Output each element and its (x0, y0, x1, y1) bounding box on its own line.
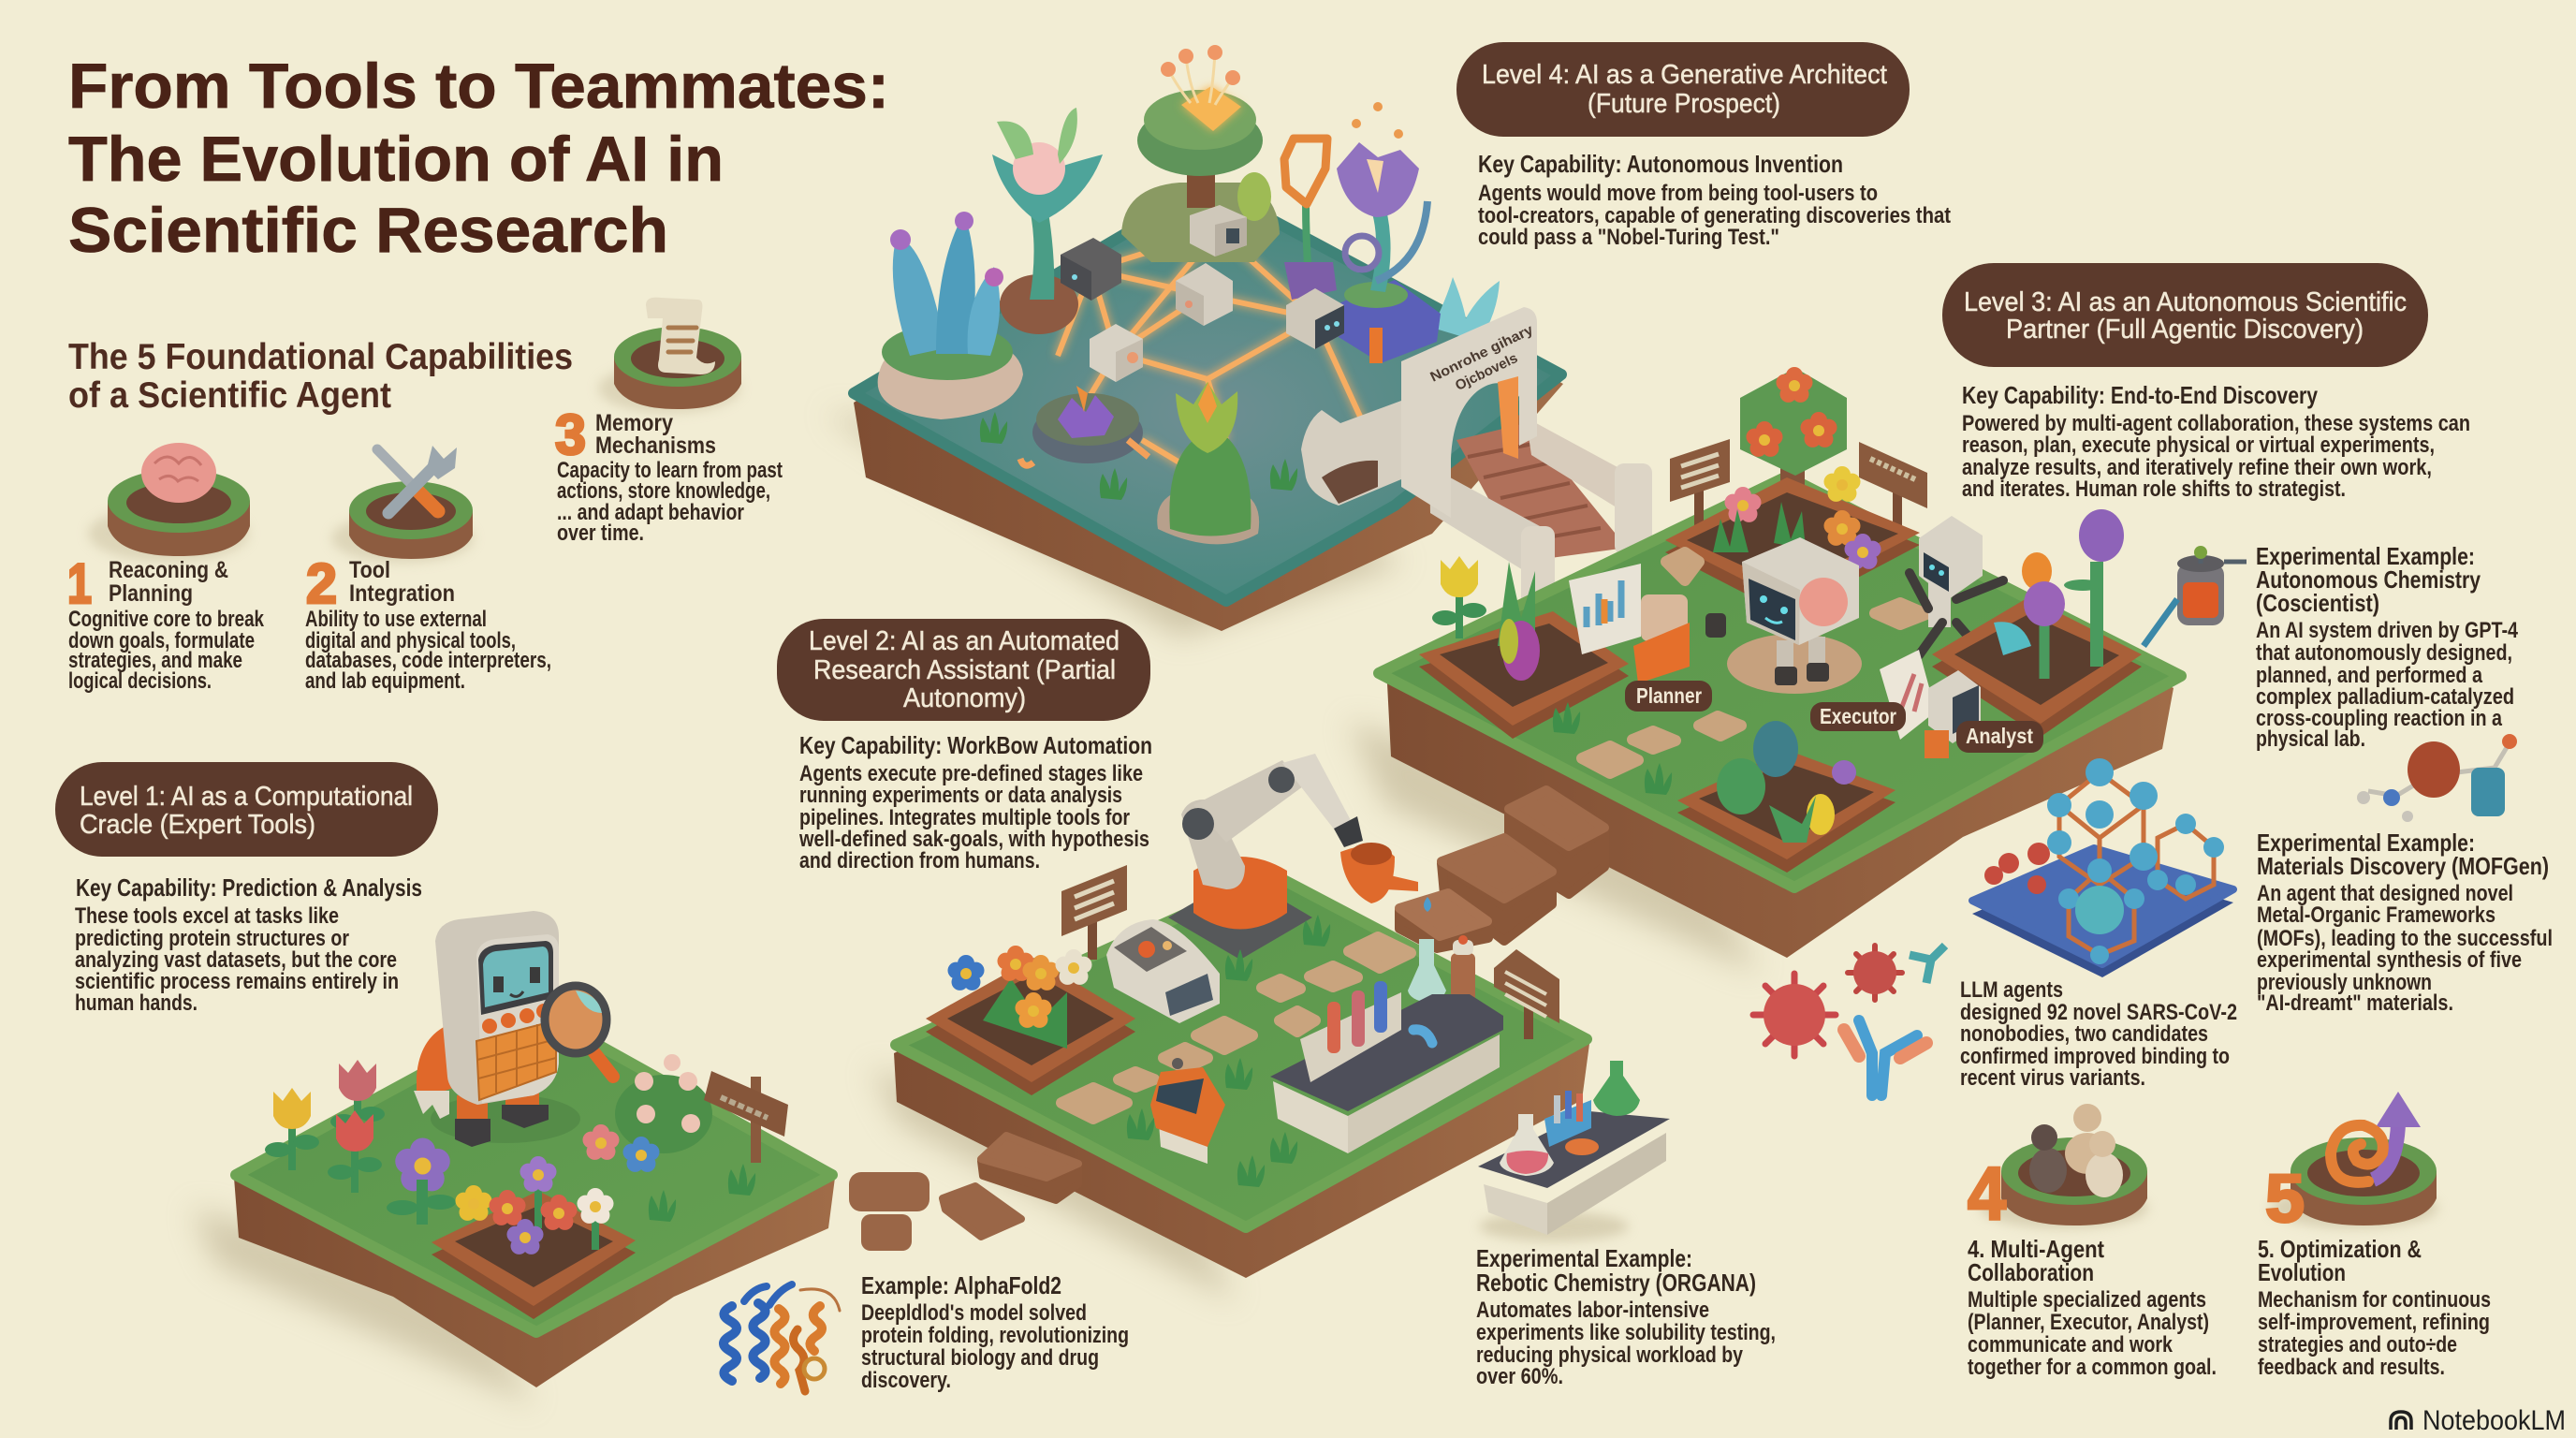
level 1 flower bed (432, 1156, 636, 1319)
capability 3: actions, store knowledge, (557, 478, 770, 504)
level 3 small robot (1910, 516, 2003, 655)
capability 3: 3 (555, 404, 586, 466)
level 2 grass tufts (1127, 915, 1330, 1187)
pill: level 2: Level 2: AI as an Automated (809, 626, 1120, 656)
text: capability 4 (1968, 1235, 2217, 1380)
capability 3: Memory (595, 410, 673, 436)
icon: tools plinth (331, 446, 474, 563)
text: capability 4: 4. Multi-Agent (1968, 1235, 2104, 1263)
icon: collaboration plinth (1980, 1104, 2148, 1228)
pill: level 3: Level 3: AI as an Autonomous Scientific (1964, 287, 2407, 317)
level 2 pavers (1061, 937, 1411, 1119)
text: level 1: predicting protein structures or (75, 926, 349, 951)
icon: molecule (2357, 734, 2517, 822)
text: level 4: Key Capability: Autonomous Invention (1478, 150, 1843, 178)
level 2 test tube rack (1300, 981, 1432, 1082)
capability 2: Tool (349, 557, 390, 583)
level 3 chart board and planner robot (1569, 564, 1690, 683)
text: level 2: pipelines. Integrates multiple tools for (799, 805, 1130, 830)
icon: evolution plinth (2270, 1092, 2438, 1228)
heading: foundational capabilities: of a Scientific Agent (68, 375, 391, 416)
text: coscientist example: planned, and performed a (2256, 663, 2483, 688)
capability 2: Integration (349, 580, 455, 607)
text: level 2 (798, 731, 1152, 873)
stepping stones: level 2 to 3 (1399, 790, 1604, 948)
text: robotic chemistry example: Automates labor-intensive (1476, 1298, 1709, 1323)
capability 2: and lab equipment. (305, 668, 465, 694)
text: capability 5: strategies and outo÷de (2258, 1332, 2457, 1357)
text: capability 4: communicate and work (1968, 1332, 2174, 1357)
capability 1: Planning (109, 580, 193, 607)
text: coscientist example (2256, 542, 2519, 752)
level 4 front tulip plant (980, 382, 1297, 544)
level 3 signs (1670, 439, 1927, 543)
icon: protein structure (724, 1284, 840, 1391)
text: robotic chemistry example: Rebotic Chemistry (ORGANA) (1476, 1269, 1756, 1297)
heading: foundational capabilities: The 5 Foundational Capabilities (68, 337, 573, 377)
text: coscientist example: Experimental Example: (2256, 542, 2475, 570)
level 3 right bed (1932, 509, 2142, 737)
text: level 2: Key Capability: WorkBow Automation (799, 731, 1152, 759)
text: level 2: Agents execute pre-defined stages like (799, 761, 1143, 786)
text: level 3: and iterates. Human role shifts to strategist. (1962, 477, 2346, 502)
text: AlphaFold2 example: protein folding, revolutionizing (861, 1323, 1129, 1348)
level 4 hexagon plant (1284, 139, 1337, 300)
level 2 lab bench (1270, 994, 1503, 1153)
capability 3: ... and adapt behavior (557, 500, 744, 525)
text: capability 5: 5. Optimization & (2258, 1235, 2422, 1263)
level 2 robot arm (1168, 754, 1363, 960)
level 3 analyst robot (1880, 650, 1981, 758)
title: Scientific Research (68, 195, 668, 266)
stepping stones: level 1 to 2 (849, 1136, 1078, 1251)
capability 1 (67, 552, 265, 694)
label: analyst: Analyst (1966, 724, 2033, 748)
capability 2: digital and physical tools, (305, 628, 516, 653)
level 4 glowing network (1058, 230, 1404, 468)
level 3 main robot (1705, 537, 1862, 694)
icon: number 5: 5 (2265, 1162, 2305, 1237)
text: level 2: running experiments or data analysis (799, 783, 1122, 808)
title: The Evolution of AI in (68, 124, 724, 195)
level 2 small orange device (1150, 1058, 1225, 1164)
text: LLM nanobodies example (1960, 977, 2237, 1091)
text: coscientist example: physical lab. (2256, 726, 2365, 752)
text: AlphaFold2 example: discovery. (861, 1368, 951, 1393)
text: coscientist example: Autonomous Chemistry (2256, 565, 2481, 594)
text: level 1: Key Capability: Prediction & Analysis (76, 873, 422, 902)
text: MOFGen example: An agent that designed novel (2257, 881, 2513, 906)
title: From Tools to Teammates: (68, 51, 889, 122)
level 1 magnifying glass (545, 986, 613, 1077)
island: level 4 (824, 45, 1652, 637)
text: capability 5 (2258, 1235, 2491, 1380)
text: MOFGen example: previously unknown (2257, 970, 2432, 995)
text: level 3: reason, plan, execute physical or virtual experiments, (1962, 433, 2435, 458)
level 3 back bed (1665, 466, 1920, 615)
level 4 purple flower (1337, 102, 1441, 363)
level 2 watering can (1340, 843, 1431, 912)
label: executor: Executor (1820, 704, 1896, 728)
text: AlphaFold2 example (861, 1271, 1129, 1393)
text: level 3 (1962, 381, 2470, 502)
level 3 left bed (1419, 556, 1629, 739)
text: capability 4: together for a common goal. (1968, 1355, 2217, 1380)
level 2 machine (1106, 919, 1220, 1023)
capability 2 (305, 552, 551, 694)
icon: reactor apparatus (2144, 546, 2247, 646)
island: level 3 (1348, 367, 2181, 974)
level 4 gate and bridge: Nonrohe gihary (1427, 321, 1536, 386)
text: LLM nanobodies example: recent virus variants. (1960, 1065, 2145, 1091)
text: level 2: well-defined sak-goals, with hypothesis (798, 827, 1149, 852)
text: level 4: could pass a "Nobel-Turing Test." (1478, 225, 1779, 250)
level 3 tree (1740, 367, 1847, 515)
capability 1: Cognitive core to break (68, 607, 265, 632)
text: robotic chemistry example: reducing physical workload by (1476, 1343, 1744, 1368)
capability 1: logical decisions. (68, 668, 212, 694)
label: planner: Planner (1636, 683, 1702, 708)
island: level 2 (871, 754, 1589, 1301)
level 3 pavers (1582, 552, 1926, 773)
icon: MOF crystal plate (1972, 758, 2233, 977)
pill: level 4: Level 4: AI as a Generative Architect (1482, 60, 1887, 90)
text: capability 5: feedback and results. (2258, 1355, 2445, 1380)
text: level 1: scientific process remains entirely in (75, 969, 399, 994)
level 1 calculator robot (414, 911, 580, 1147)
text: capability 4: Multiple specialized agents (1968, 1287, 2206, 1313)
pill: level 3: Partner (Full Agentic Discovery) (2006, 315, 2364, 345)
level 1 bush and sign (582, 1054, 788, 1222)
labels: agent roles (1625, 681, 2043, 753)
text: coscientist example: An AI system driven by GPT-4 (2256, 618, 2519, 643)
text: level 3: Powered by multi-agent collaboration, these systems can (1962, 411, 2470, 436)
pill: level 4 (1456, 42, 1910, 137)
text: AlphaFold2 example: Example: AlphaFold2 (861, 1271, 1061, 1299)
icon: number 4: 4 (1968, 1152, 2006, 1235)
pill: level 2: Research Assistant (Partial (813, 655, 1116, 685)
level 1 tulips (265, 1060, 456, 1225)
text: level 3: analyze results, and iteratively refine their own work, (1962, 455, 2432, 480)
text: MOFGen example: Experimental Example: (2257, 829, 2475, 857)
heading: foundational capabilities (68, 337, 573, 416)
text: MOFGen example: "AI-dreamt" materials. (2257, 990, 2453, 1016)
label: planner (1625, 681, 1712, 712)
level 4 small pot (1020, 386, 1149, 465)
text: capability 5: Mechanism for continuous (2258, 1287, 2491, 1313)
text: coscientist example: cross-coupling reaction in a (2256, 706, 2503, 731)
text: MOFGen example: experimental synthesis of five (2257, 947, 2522, 973)
level 4 tree (1121, 45, 1280, 262)
capability 2: Ability to use external (305, 607, 487, 632)
text: coscientist example: complex palladium-catalyzed (2256, 684, 2514, 710)
level 4 gate and bridge: Ojcbovels (1453, 350, 1520, 394)
text: level 1: analyzing vast datasets, but the core (75, 947, 397, 973)
text: level 3: Key Capability: End-to-End Discovery (1962, 381, 2318, 409)
level 4 glowing flower (992, 108, 1103, 334)
text: level 1 (75, 873, 422, 1016)
level 4 left blue plant (878, 212, 1023, 419)
text: coscientist example: (Coscientist) (2256, 589, 2379, 617)
level 2 sign (1061, 865, 1127, 960)
text: LLM nanobodies example: nonobodies, two candidates (1960, 1021, 2208, 1047)
capability 2: databases, code interpreters, (305, 648, 551, 673)
text: LLM nanobodies example: LLM agents (1960, 977, 2063, 1003)
text: LLM nanobodies example: confirmed improved binding to (1960, 1044, 2230, 1069)
capability 3: Capacity to learn from past (557, 458, 783, 483)
level 2 flower bed (926, 946, 1135, 1095)
text: AlphaFold2 example: Deepldlod's model solved (861, 1300, 1087, 1326)
capability 1: 1 (67, 552, 92, 615)
text: robotic chemistry example: experiments like solubility testing, (1476, 1320, 1776, 1345)
text: coscientist example: that autonomously designed, (2256, 640, 2512, 666)
text: level 1: human hands. (75, 990, 198, 1016)
pill: level 1: Cracle (Expert Tools) (80, 810, 315, 840)
capability 3: Mechanisms (595, 433, 716, 459)
level 2 tall flask and bottle (1408, 935, 1475, 1009)
island: level 1 (192, 911, 835, 1404)
pill: level 3 (1942, 263, 2428, 367)
text: robotic chemistry example: Experimental Example: (1476, 1244, 1692, 1272)
pill: level 2: Autonomy) (903, 683, 1026, 713)
pill: level 1: Level 1: AI as a Computational (80, 782, 413, 812)
icon: scroll plinth (598, 298, 741, 413)
text: capability 5: Evolution (2258, 1258, 2346, 1286)
text: capability 4: Collaboration (1968, 1258, 2094, 1286)
pill: level 1 (55, 762, 438, 857)
text: AlphaFold2 example: structural biology and drug (861, 1345, 1099, 1371)
icon: viruses and antibodies (1753, 946, 1945, 1095)
text: level 2: and direction from humans. (799, 848, 1040, 873)
text: MOFGen example (2257, 829, 2553, 1016)
capability 1: Reaconing & (109, 557, 228, 583)
text: capability 4: (Planner, Executor, Analyst) (1968, 1310, 2209, 1335)
capability 2: 2 (306, 552, 337, 615)
level 4 gate and bridge (1301, 307, 1652, 615)
text: robotic chemistry example (1476, 1244, 1776, 1389)
capability 1: down goals, formulate (68, 628, 255, 653)
pill: level 2 (777, 619, 1150, 721)
label: analyst (1956, 721, 2043, 753)
icon: brain plinth (88, 443, 250, 562)
text: capability 5: self-improvement, refining (2258, 1310, 2490, 1335)
pill: level 4: (Future Prospect) (1588, 89, 1780, 119)
text: level 4 (1478, 150, 1951, 250)
text: level 4: Agents would move from being tool-users to (1478, 181, 1878, 206)
text: level 4: tool-creators, capable of generating discoveries that (1478, 203, 1951, 228)
capability 3 (555, 404, 783, 546)
capability 3: over time. (557, 521, 644, 546)
icon: small chemistry bench (1478, 1061, 1670, 1241)
level 4 agent cubes (1061, 205, 1344, 382)
level 2 right sign (1494, 949, 1559, 1039)
text: MOFGen example: Metal-Organic Frameworks (2257, 902, 2496, 928)
level 3 front bed (1553, 702, 1895, 873)
level 4 spiky teal plant (1432, 277, 1500, 342)
text: robotic chemistry example: over 60%. (1476, 1364, 1563, 1389)
capability 1: strategies, and make (68, 648, 242, 673)
text: LLM nanobodies example: designed 92 novel SARS-CoV-2 (1960, 1000, 2237, 1025)
text: level 1: These tools excel at tasks like (75, 903, 339, 929)
title (68, 51, 889, 266)
